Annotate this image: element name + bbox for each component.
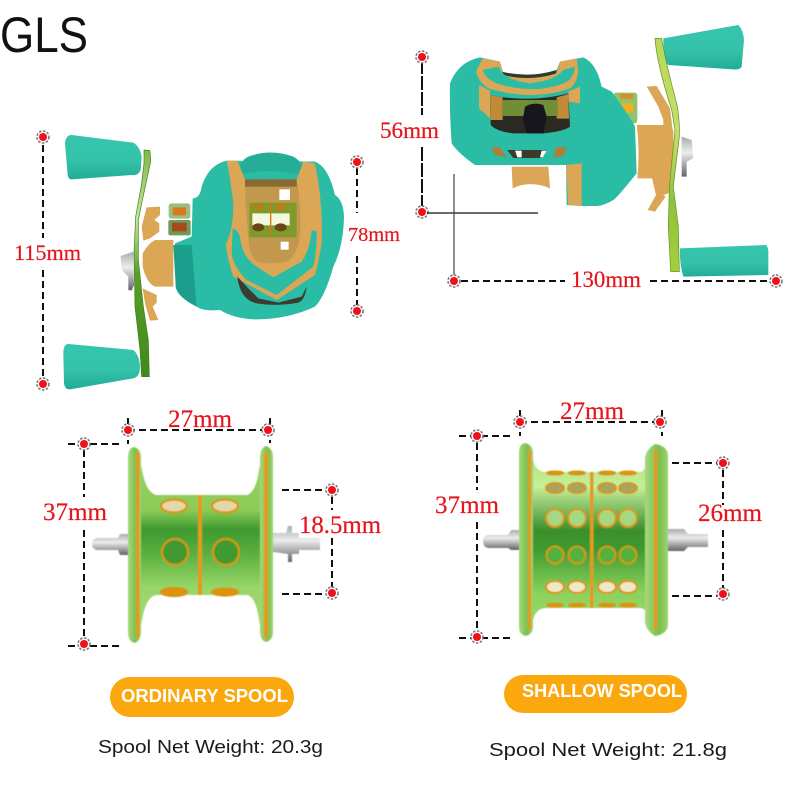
dimension: shallow spool 27mm width	[514, 398, 666, 436]
icon: teal chevron accent	[232, 228, 317, 295]
icon: spool window	[245, 179, 300, 263]
icon: reel body	[450, 57, 637, 206]
dimension: ordinary spool 27mm width	[122, 406, 274, 444]
dimension: shallow spool 26mm: 26mm	[698, 500, 763, 527]
dimension: 78mm body height: 78mm	[348, 224, 400, 246]
icon: screw	[682, 137, 693, 177]
icon: level-wind rollers	[168, 203, 191, 235]
dimension: 78mm body height	[348, 156, 400, 317]
icon: hub	[637, 125, 673, 178]
spool: ordinary	[92, 446, 320, 643]
dimension: ordinary spool 18.5mm: 18.5mm	[299, 512, 382, 539]
icon: tan back plate	[566, 163, 582, 206]
icon: bottom handle knob	[63, 344, 140, 389]
caption: ordinary spool weight: Spool Net Weight: 20.3g	[98, 736, 323, 757]
icon: top handle knob	[65, 135, 142, 179]
icon: crank arm	[655, 38, 679, 272]
badge: ordinary spool	[110, 677, 294, 717]
icon: centre ring	[590, 472, 594, 608]
icon: barrel with flares	[530, 445, 652, 635]
brand title: GLS	[0, 7, 88, 63]
icon: drag star	[647, 86, 673, 212]
icon: drag star upper	[142, 207, 160, 241]
icon: tan arch	[476, 58, 578, 95]
dimension: shallow spool 26mm	[672, 457, 763, 600]
icon: tan frame	[226, 161, 322, 300]
icon: reel body	[175, 161, 344, 319]
icon: hub	[143, 240, 173, 287]
icon: spool holes	[546, 472, 637, 606]
decorative guide lines	[427, 174, 538, 276]
icon: drag star lower	[143, 288, 158, 321]
icon: teal arch accent	[483, 67, 575, 89]
icon: left flange	[519, 443, 533, 636]
icon: black line guide	[523, 104, 547, 133]
caption: shallow spool weight: Spool Net Weight: 21.8g	[489, 739, 727, 760]
icon: level-wind rollers	[613, 93, 637, 123]
reel: handle-left back view	[63, 135, 344, 389]
dimension: ordinary spool 18.5mm	[282, 484, 382, 599]
icon: lower vents	[492, 147, 567, 158]
icon: left axle	[483, 530, 519, 550]
dimension: ordinary spool 27mm width: 27mm	[168, 406, 233, 433]
icon: visible spool	[249, 203, 297, 237]
spool: shallow	[483, 443, 708, 636]
dimension: 56mm body height: 56mm	[380, 118, 439, 143]
icon: right axle	[273, 526, 320, 562]
icon: under-arch gap	[502, 70, 557, 79]
icon: crank arm	[134, 150, 151, 377]
icon: top handle knob	[663, 25, 744, 69]
dimension: 56mm body height	[380, 51, 439, 218]
icon: right axle	[668, 529, 708, 551]
icon: lower vent	[237, 277, 307, 305]
icon: left flange	[128, 447, 141, 643]
dimension: shallow spool 37mm height	[435, 430, 514, 643]
dimension: 115mm handle span: 115mm	[14, 240, 81, 265]
dimension: shallow spool 27mm width: 27mm	[560, 398, 625, 425]
icon: barrel with flares	[138, 448, 263, 642]
icon: thumb dome	[239, 152, 305, 176]
dimension: 130mm total length: 130mm	[571, 267, 641, 292]
icon: cone shading	[173, 245, 197, 307]
dimension: ordinary spool 37mm height	[43, 438, 123, 650]
icon: spool holes	[161, 500, 239, 596]
icon: right flange	[260, 446, 273, 642]
icon: right flange	[645, 444, 668, 636]
dimension: 130mm total length	[448, 267, 782, 292]
icon: foot	[512, 167, 550, 188]
badge: shallow spool: SHALLOW SPOOL	[522, 680, 682, 701]
icon: window	[490, 93, 570, 133]
reel: handle-right front view	[450, 25, 768, 277]
badge: ordinary spool: ORDINARY SPOOL	[121, 685, 288, 706]
dimension: 115mm handle span	[14, 131, 81, 390]
dimension: ordinary spool 37mm height: 37mm	[43, 499, 108, 526]
dimension: shallow spool 37mm height: 37mm	[435, 492, 500, 519]
icon: crank nut	[121, 252, 134, 291]
badge: shallow spool	[504, 675, 687, 713]
icon: bottom handle knob	[680, 245, 768, 277]
icon: tan legs	[479, 85, 580, 118]
icon: centre ring	[198, 495, 202, 595]
icon: left axle	[92, 534, 128, 555]
